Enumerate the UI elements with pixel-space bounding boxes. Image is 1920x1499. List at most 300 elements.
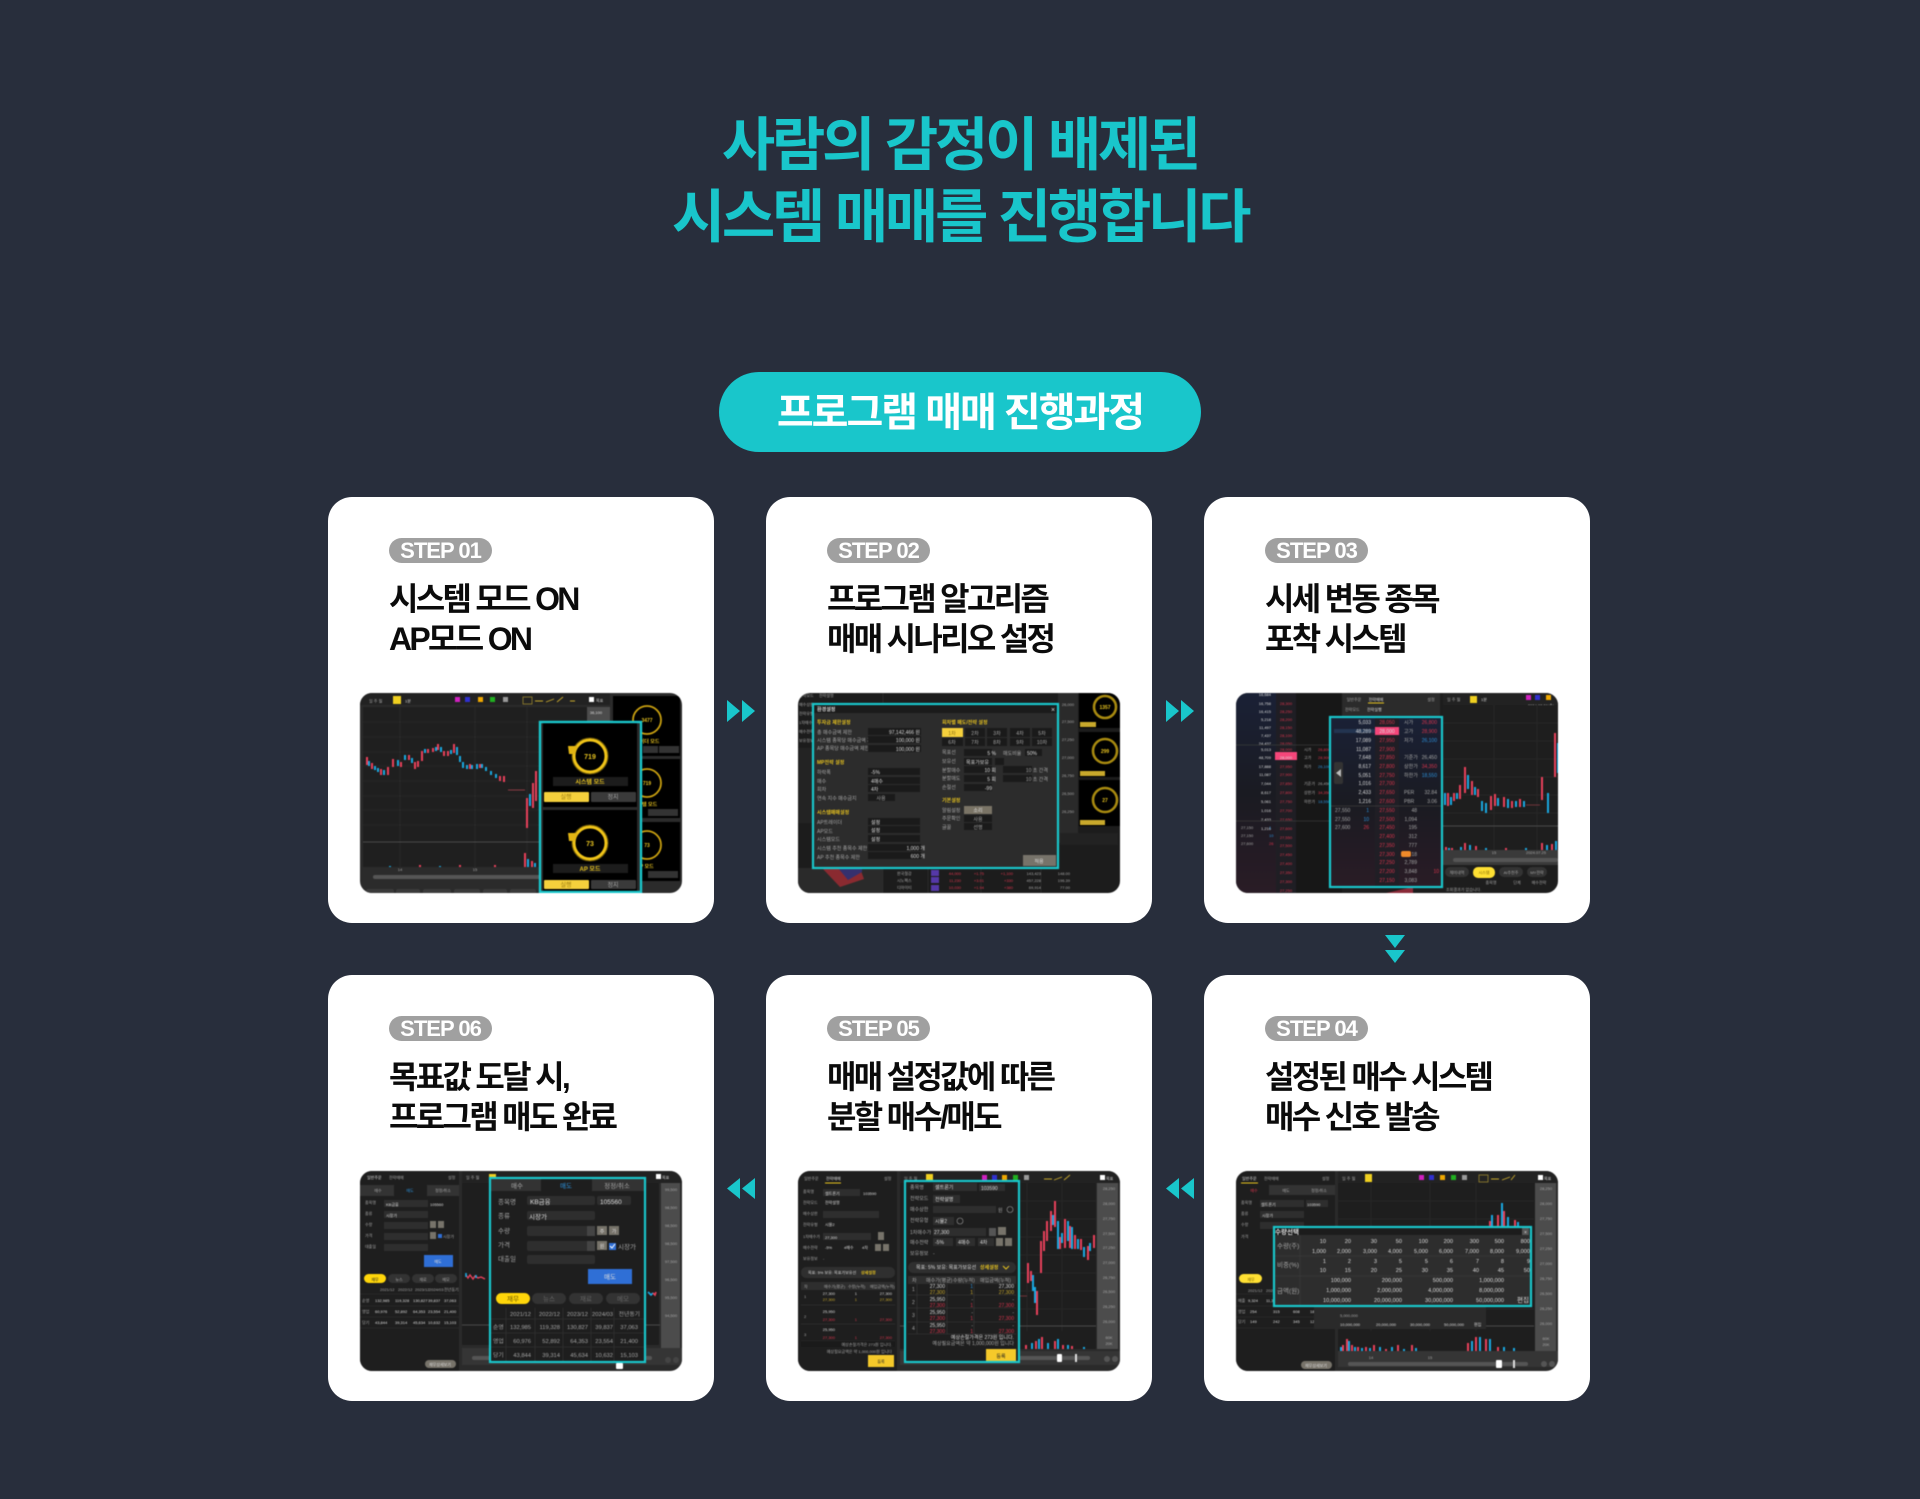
highlight: strategy form: - — [1012, 1310, 1014, 1316]
highlight: quantity table: × — [1524, 1230, 1527, 1236]
highlight: sell form: 순영 — [493, 1323, 504, 1331]
highlight: strategy form: 시뮬2 — [935, 1219, 947, 1225]
highlight: quantity table: 7 — [1476, 1259, 1479, 1265]
left panel: 39,314 — [395, 1320, 408, 1325]
left panel: 설정 — [448, 1174, 456, 1180]
highlight: quantity table: 9,000 — [1516, 1249, 1530, 1255]
highlight: mode panels: 시스템 모드 — [575, 778, 605, 786]
highlight: sell form: 매수 — [511, 1182, 523, 1190]
chart — [1386, 693, 1558, 893]
left panel: 재료 — [419, 1276, 427, 1282]
left panel: 매도 — [1282, 1187, 1290, 1193]
right settings column: 소리 — [973, 807, 983, 814]
left panel: 119,328 — [395, 1298, 410, 1303]
highlight: quantity table: 200,000 — [1382, 1278, 1402, 1284]
chart: 2024.07.26(수) — [1528, 702, 1555, 708]
side gauges — [1053, 693, 1120, 845]
left panel: 가격 — [365, 1232, 373, 1238]
screenshot: settings dialog: 보유정보 — [799, 737, 814, 743]
background order book: 28,100 — [1280, 733, 1293, 738]
order panel tabs: 전략매매 — [1369, 696, 1384, 702]
highlight: quantity table: 30 — [1371, 1239, 1377, 1245]
left panel: 37,063 — [444, 1298, 457, 1303]
left panel: 1 — [855, 1291, 858, 1296]
highlight: strategy form: 3 — [912, 1313, 915, 1319]
highlight: sell form: 15,103 — [620, 1353, 638, 1359]
background order book: 27,650 — [1280, 817, 1293, 822]
highlight: sell form: 2022/12 — [539, 1312, 560, 1318]
background table: 196.39 — [1058, 878, 1071, 883]
highlight: quantity table: 50 — [1396, 1239, 1402, 1245]
background order book: 기준가 — [1304, 780, 1315, 786]
highlight: mode panels: AP 모드 — [580, 866, 601, 873]
right settings column: 5차 — [1038, 730, 1046, 737]
side gauges: 73 — [644, 843, 650, 849]
left settings column: 시스템모드 — [817, 836, 840, 843]
highlight: strategy form: 셀트론기 — [935, 1184, 953, 1191]
left panel: 일반주문 — [804, 1175, 819, 1181]
heading step 06: 목표값 도달 시, — [389, 1059, 568, 1095]
highlight: quantity table: 15 — [1345, 1268, 1351, 1274]
highlight: sell form — [490, 1178, 645, 1362]
highlight: strategy form: - — [971, 1310, 973, 1316]
chart: 94,500 — [665, 1313, 678, 1318]
chart: 28,250 — [1103, 1186, 1116, 1191]
highlight: quantity table: 500 — [1495, 1239, 1504, 1245]
left panel: 당기 — [362, 1319, 370, 1325]
left panel: 105560 — [430, 1202, 444, 1207]
highlight: strategy form: 27,300 — [999, 1284, 1014, 1290]
left panel: 시장가 — [386, 1212, 397, 1218]
side gauges: 3477 — [641, 718, 653, 724]
highlight: order ladder: 시가 — [1404, 719, 1414, 726]
highlight: strategy form: 목표: 5% 보유: 목표가보유선 — [916, 1264, 977, 1271]
highlight: quantity table: 50,000,000 — [1476, 1298, 1504, 1304]
left panel: 대출일 — [365, 1243, 376, 1249]
background order book: 17,888 — [1259, 764, 1272, 769]
step badge 05: STEP 05 — [838, 1016, 919, 1041]
highlight: quantity table: 10 — [1320, 1239, 1326, 1245]
left panel: 설정 — [884, 1175, 892, 1181]
chart: 20K — [1542, 1342, 1550, 1347]
highlight: order ladder: 777 — [1409, 843, 1417, 849]
highlight: strategy form: 25,950 — [930, 1323, 945, 1329]
arrow: step 1 to 2 — [727, 700, 755, 722]
chart: 일 주 월 — [904, 1175, 918, 1181]
highlight: sell form: 가격 — [498, 1240, 510, 1249]
left settings column: AP모드 — [817, 829, 833, 835]
left panel: 매수전략 — [803, 1244, 818, 1250]
right settings column: 5 회 — [987, 776, 996, 783]
highlight: sell form: 메모 — [617, 1295, 629, 1303]
highlight: sell form: 2021/12 — [510, 1312, 531, 1318]
highlight: sell form: 23,554 — [595, 1339, 614, 1345]
left panel: 재무 — [371, 1276, 379, 1282]
background table: 77.00 — [1060, 885, 1071, 890]
highlight: strategy form: - — [971, 1323, 973, 1329]
left panel: 27,300 — [823, 1291, 836, 1296]
highlight: quantity table: 8,000,000 — [1479, 1288, 1504, 1294]
screenshot: system mode gauges: 36,100 — [590, 710, 603, 715]
right settings column: 5 % — [987, 751, 997, 757]
highlight: sell form: 대출일 — [498, 1254, 516, 1263]
screenshot: system mode gauges: 15 — [473, 867, 478, 872]
left panel: 차 — [804, 1283, 808, 1289]
heading step 03 — [1265, 581, 1440, 657]
highlight: order ladder: 27,250 — [1379, 860, 1395, 866]
left panel: 11,315 — [1266, 1298, 1279, 1303]
highlight: sell form: 시장가 — [618, 1242, 636, 1251]
highlight: order ladder: 27,600 — [1379, 799, 1395, 805]
background order book: 27,800 — [1280, 790, 1293, 795]
heading step 06 — [389, 1059, 617, 1135]
highlight: order ladder: PER — [1404, 790, 1415, 796]
background order book: 27,400 — [1280, 861, 1293, 866]
screenshot: strategy split orders — [797, 1170, 1121, 1372]
right settings column: 회차별 매도/전략 설정 — [942, 719, 988, 726]
heading step 05 — [827, 1059, 1055, 1135]
highlight: sell form: 2023/12 — [567, 1312, 588, 1318]
left panel: 재무 — [1247, 1276, 1255, 1282]
background table: 457,228 — [1027, 878, 1042, 883]
left panel: 43,844 — [375, 1320, 388, 1325]
highlight: sell form: 재무 — [507, 1295, 519, 1303]
highlight: sell form: KB금융 — [530, 1198, 551, 1206]
toolbar: 목표 — [596, 698, 604, 703]
highlight: order ladder: 27,750 — [1379, 773, 1395, 779]
left settings column: 설정 — [871, 819, 880, 826]
heading step 01 — [389, 581, 578, 657]
highlight: order ladder: 고가 — [1404, 728, 1414, 735]
background order book: 하한가 — [1304, 798, 1315, 804]
highlight: quantity table: 45 — [1498, 1268, 1504, 1274]
right settings column: 분할매도 — [942, 775, 961, 782]
highlight: order ladder: 27,350 — [1379, 843, 1395, 849]
background order book: 5,013 — [1261, 747, 1272, 752]
highlight: order ladder: 27,200 — [1379, 869, 1395, 875]
highlight: strategy form: 25,950 — [930, 1310, 945, 1316]
highlight: sell form: 21,400 — [620, 1339, 638, 1345]
right settings column: 적용 — [1034, 858, 1044, 865]
background order book: 27,150 — [1241, 833, 1254, 838]
highlight: quantity table: 35 — [1447, 1268, 1453, 1274]
highlight: order ladder: 27,950 — [1379, 738, 1395, 744]
chart: 편집 — [1474, 1321, 1482, 1327]
highlight: strategy form: 27,300 — [999, 1329, 1014, 1335]
highlight: quantity table: 6 — [1450, 1259, 1453, 1265]
right settings column: 10 초 간격 — [1026, 767, 1048, 774]
highlight: strategy form: 4매수 — [958, 1239, 970, 1246]
left panel: 3 — [804, 1332, 807, 1337]
chart: 20,000,000 — [1376, 1322, 1397, 1327]
highlight: quantity table: 수량(주) — [1277, 1242, 1299, 1250]
left panel: 21,400 — [444, 1309, 457, 1314]
highlight: strategy form: 103590 — [981, 1186, 998, 1192]
highlight: mode panels: 정지 — [607, 793, 619, 801]
highlight: mode panels: 실행 — [560, 793, 572, 801]
background table — [798, 868, 1071, 893]
chart: 60K — [1105, 1335, 1113, 1340]
background order book: 시가 — [1304, 746, 1312, 752]
left settings column — [817, 719, 925, 861]
screenshot: sell order — [359, 1170, 683, 1372]
left settings column: 100,000 원 — [896, 746, 920, 753]
highlight: quantity table: 금액(원) — [1277, 1286, 1299, 1295]
highlight: order ladder: 11,087 — [1356, 747, 1371, 753]
highlight: sell form: 매도 — [604, 1273, 616, 1281]
highlight: order ladder: 10 — [1433, 869, 1439, 875]
side gauges: 트레이더 모드 — [630, 738, 660, 745]
highlight: sell form: 43,844 — [513, 1353, 532, 1359]
left settings column: 연속 지수 매수금지 — [817, 795, 857, 802]
highlight: quantity table: 2,000,000 — [1377, 1288, 1402, 1294]
highlight: strategy form: 상세설정 — [980, 1264, 999, 1271]
background order book: 28,200 — [1280, 717, 1293, 722]
screenshot: quantity selection — [1235, 1170, 1559, 1372]
order panel tabs: 전략실행 — [1367, 706, 1382, 712]
left panel: 메모 — [442, 1276, 450, 1282]
highlight: sell form: 종목명 — [498, 1197, 516, 1206]
background order book: 27,500 — [1280, 843, 1293, 848]
highlight: strategy form: 전략모드 — [910, 1195, 929, 1202]
background table: +1,100 — [1001, 871, 1014, 876]
left panel: 종류 — [1241, 1210, 1249, 1216]
highlight: order ladder: 기준가 — [1404, 754, 1418, 761]
left panel: 2 — [804, 1314, 807, 1319]
left panel: 27,300 — [823, 1335, 836, 1340]
left settings column: 설정 — [871, 827, 880, 834]
left panel: 일반주문 — [367, 1174, 382, 1180]
left panel: 25,950 — [823, 1309, 836, 1314]
background order book: 1,016 — [1261, 808, 1272, 813]
highlight: order ladder: 48 — [1411, 808, 1417, 814]
highlight: quantity table: 300 — [1470, 1239, 1479, 1245]
chart: 단계 — [1513, 879, 1521, 885]
heading step 06: 프로그램 매도 완료 — [389, 1099, 615, 1135]
screenshot: settings dialog: 매수전략 — [799, 728, 814, 734]
chart: 26,500 — [1103, 1289, 1116, 1294]
order panel tabs: 일반주문 — [1347, 696, 1362, 702]
arrow: step 5 from 4 — [1166, 1178, 1194, 1199]
right settings column: 50% — [1027, 751, 1038, 757]
left settings column: AP트레이더 — [817, 819, 842, 826]
chart: 매수전략 — [1532, 879, 1547, 885]
highlight: quantity table: 2,000 — [1337, 1249, 1351, 1255]
arrow: step 6 from 5 — [727, 1178, 755, 1199]
highlight: quantity table: 20 — [1345, 1239, 1351, 1245]
left panel: 종목명 — [803, 1188, 814, 1194]
left panel: 전략모드 — [803, 1199, 818, 1205]
left panel: 영업 — [1238, 1308, 1246, 1314]
screenshot: settings dialog: 매수상한 — [799, 701, 814, 707]
highlight: strategy form: 전략유형 — [910, 1217, 928, 1224]
left panel: 5 — [1326, 1309, 1329, 1314]
left panel: 12,480 — [1291, 1298, 1304, 1303]
chart: 27,000 — [1103, 1260, 1116, 1265]
highlight: strategy form: 27,300 — [930, 1316, 945, 1322]
highlight: strategy form: 27,300 — [930, 1329, 945, 1335]
left panel: - — [823, 1256, 825, 1261]
highlight: order ladder: 10 — [1363, 817, 1369, 823]
left panel: 매수 — [374, 1187, 382, 1193]
left settings column: 600 개 — [911, 853, 925, 860]
left settings column: AP 추천 종목수 제한 — [817, 854, 860, 861]
background order book: 상한가 — [1304, 789, 1315, 795]
highlight: order ladder: 8,617 — [1358, 764, 1371, 770]
highlight: order ladder: 27,700 — [1379, 781, 1395, 787]
background order book: 27,700 — [1280, 808, 1293, 813]
title — [672, 113, 1250, 250]
chart — [462, 1171, 682, 1365]
side gauges — [613, 696, 680, 881]
highlight: order ladder: 27,400 — [1379, 834, 1395, 840]
left panel: 전략유형 — [803, 1221, 818, 1227]
left panel: 27,300 — [880, 1335, 893, 1340]
background order book: 26,800 — [1318, 747, 1331, 752]
highlight: quantity table: 2 — [1348, 1259, 1351, 1265]
left panel: 1 — [855, 1317, 858, 1322]
background order book: 48,709 — [1259, 755, 1272, 760]
background order book: 28,900 — [1318, 755, 1331, 760]
highlight: quantity table — [1274, 1227, 1531, 1306]
left settings column: 투자금 제한설정 — [817, 719, 851, 726]
chart — [1314, 1171, 1558, 1368]
highlight: order ladder: 27,150 — [1379, 878, 1395, 884]
left panel: 103590 — [863, 1191, 877, 1196]
highlight: quantity table: 6,000 — [1439, 1249, 1453, 1255]
panel: step 03 — [1204, 497, 1590, 923]
left panel: 18 — [1310, 1309, 1315, 1314]
left panel: 2023/12 — [415, 1287, 430, 1292]
highlight: strategy form: 27,300 — [930, 1303, 945, 1309]
highlight: quantity table: 1,000,000 — [1479, 1278, 1504, 1284]
highlight: order ladder: 48,289 — [1356, 729, 1371, 735]
highlight: sell form: 영업 — [493, 1337, 504, 1345]
chart: 28,000 — [1540, 1201, 1553, 1206]
highlight: mode panels: 실행 — [560, 881, 572, 889]
background order book: 2,433 — [1261, 817, 1272, 822]
highlight: strategy form — [905, 1181, 1019, 1362]
highlight: quantity table: 20,000,000 — [1374, 1298, 1402, 1304]
chart: 26,750 — [1103, 1275, 1116, 1280]
highlight: order ladder: 17,089 — [1356, 738, 1371, 744]
right settings column: 기본설정 — [942, 797, 961, 804]
highlight: quantity table: 9 — [1527, 1259, 1530, 1265]
left panel: 셀트론기 — [825, 1190, 840, 1196]
highlight: order ladder: 27,450 — [1379, 825, 1395, 831]
background order book: 28,000 — [1280, 747, 1293, 752]
left panel: 64,353 — [413, 1309, 426, 1314]
highlight: order ladder: 18,550 — [1422, 773, 1437, 779]
highlight: mode panels: 정지 — [607, 881, 619, 889]
highlight: strategy form: 전략설명 — [935, 1196, 953, 1203]
highlight: settings dialog — [813, 704, 1058, 868]
step badge 04: STEP 04 — [1276, 1016, 1357, 1041]
highlight: order ladder: 26,450 — [1422, 755, 1437, 761]
panel: step 02 — [766, 497, 1152, 923]
highlight: order ladder: 27,850 — [1379, 755, 1395, 761]
highlight: strategy form: 27,300 — [930, 1284, 945, 1290]
background table: 11,230 — [949, 878, 962, 883]
highlight: sell form: 종류 — [498, 1212, 510, 1220]
screenshot: order book — [1235, 692, 1559, 894]
background order book: 28,250 — [1280, 709, 1293, 714]
background table: 143,423 — [1027, 871, 1042, 876]
highlight: sell form: 37,063 — [620, 1325, 638, 1331]
highlight: order ladder: 195 — [1409, 825, 1417, 831]
side gauges: 27 — [1102, 798, 1108, 804]
highlight: quantity table: 3 — [1374, 1259, 1377, 1265]
highlight: strategy form: 예상필요금액은 약 1,000,000원 입니다 — [932, 1340, 1014, 1347]
background order book: 1,216 — [1261, 826, 1272, 831]
left panel: 종류 — [365, 1210, 373, 1216]
highlight: strategy form: 1 — [970, 1284, 973, 1290]
chart: 95,500 — [665, 1295, 678, 1300]
side gauges: AP 모드 — [636, 864, 654, 870]
chart: 98,500 — [665, 1205, 678, 1210]
chart: 일 주 월 — [1342, 1175, 1356, 1181]
step badge 01: STEP 01 — [400, 538, 481, 563]
heading step 04: 설정된 매수 시스템 — [1265, 1059, 1491, 1095]
left panel: 순영 — [362, 1297, 370, 1303]
panel: step 06 — [328, 975, 714, 1401]
right settings column: 3차 — [993, 730, 1001, 737]
screenshot: settings dialog: 1차매수가 — [799, 719, 816, 725]
chart: 26,000 — [1540, 1321, 1553, 1326]
left panel: 4매수 — [844, 1244, 854, 1250]
highlight: mode panels — [540, 722, 641, 892]
left panel: 149 — [1250, 1319, 1257, 1324]
left panel: 242 — [1273, 1319, 1280, 1324]
background order book: 10 — [1269, 833, 1274, 838]
screenshot: settings dialog — [797, 692, 1121, 894]
right settings column: 글꼴 — [942, 825, 952, 831]
left settings column: 시스템매매설정 — [817, 809, 850, 816]
highlight: strategy form: 1 — [970, 1316, 973, 1322]
heading step 04: 매수 신호 발송 — [1265, 1099, 1438, 1135]
left settings column: 100,000 원 — [896, 737, 920, 744]
chart: 2024.07.25 — [1526, 850, 1547, 855]
panel: step 04 — [1204, 975, 1590, 1401]
left panel: 60,976 — [375, 1309, 388, 1314]
highlight: quantity table: 수량선택 — [1275, 1227, 1299, 1236]
left panel — [798, 1171, 897, 1371]
highlight: sell form: 당기 — [493, 1351, 504, 1359]
background table: 148.00 — [1058, 871, 1071, 876]
highlight: order ladder: 7,648 — [1358, 755, 1371, 761]
left panel: 설정 — [1322, 1175, 1330, 1181]
highlight: strategy form: 4차 — [980, 1239, 988, 1246]
left panel: 전략매매 — [826, 1175, 841, 1181]
chart — [900, 1171, 1120, 1365]
left panel: 매수가(평균) — [824, 1283, 846, 1289]
highlight: quantity table: 100,000 — [1331, 1278, 1351, 1284]
left panel: 27,300 — [825, 1235, 838, 1240]
left panel — [1236, 1171, 1335, 1371]
background order book: 26,450 — [1318, 781, 1331, 786]
left settings column: 하락폭 — [817, 769, 831, 776]
background order book: 28,150 — [1280, 725, 1293, 730]
left panel: 예상필요금액은 약 1,000,000원 입니다 — [827, 1348, 892, 1354]
highlight: order ladder: 저가 — [1404, 737, 1414, 744]
left settings column: 매수 — [817, 778, 827, 785]
heading step 02 — [827, 581, 1053, 657]
highlight: order ladder: 3.06 — [1427, 799, 1437, 805]
highlight: sell form: 119,328 — [539, 1325, 560, 1331]
left panel: 1,804 — [1316, 1298, 1327, 1303]
highlight: order ladder: 27,600 — [1335, 825, 1351, 831]
background order book: 27,300 — [1280, 879, 1293, 884]
